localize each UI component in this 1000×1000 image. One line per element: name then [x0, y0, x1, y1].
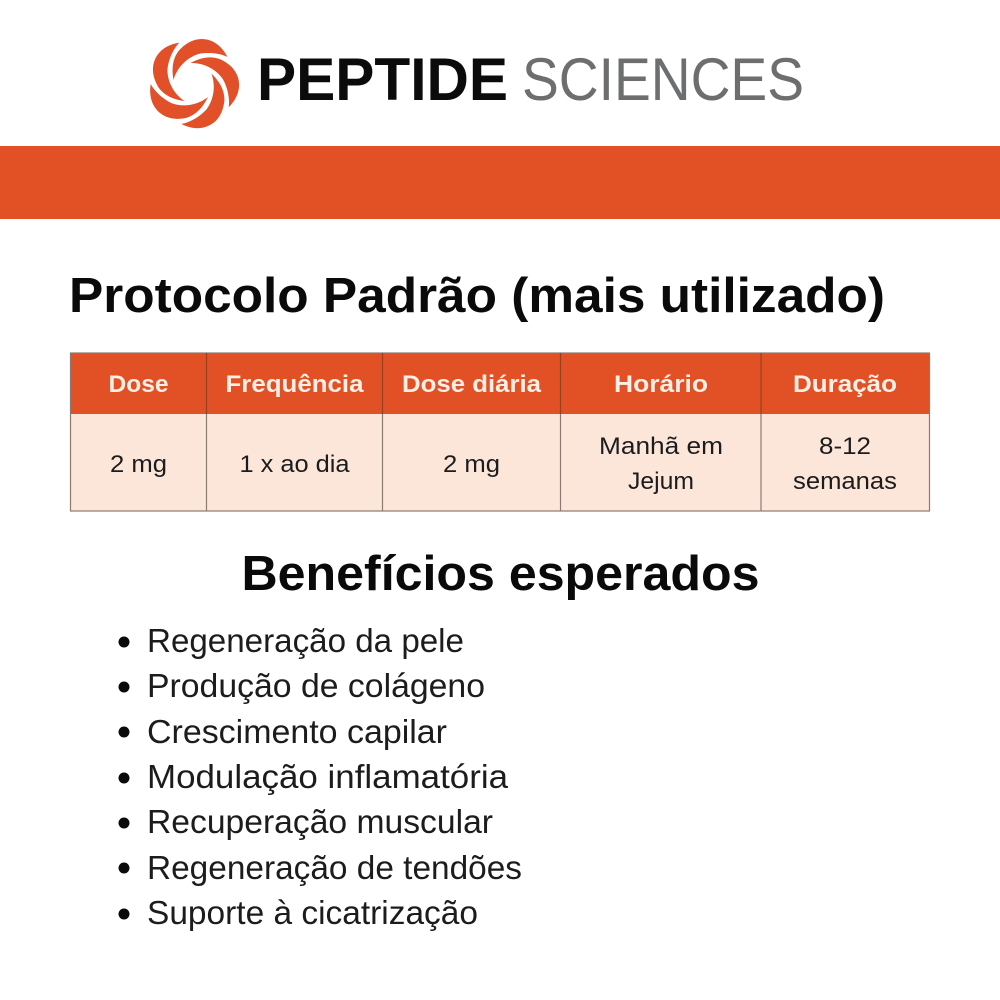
list item 4: Modulação inflamatória: [147, 758, 509, 795]
benefits list: [118, 622, 522, 931]
table body values: 2 mg: [443, 451, 500, 478]
icon: swirl logo mark: [140, 37, 246, 139]
heading: protocol: Protocolo Padrão (mais utilizado): [69, 269, 885, 323]
logo wordmark: SCIENCES: SCIENCES: [522, 46, 804, 113]
heading: benefits: Benefícios esperados: [242, 547, 760, 601]
list item 1: Regeneração da pele: [147, 622, 464, 659]
table header labels: Frequência: [226, 371, 364, 398]
list item 7: Suporte à cicatrização: [147, 894, 478, 931]
table header labels: [108, 371, 897, 398]
table body values: semanas: [793, 468, 897, 495]
table header labels: Horário: [614, 371, 708, 398]
table header labels: Dose: [108, 371, 168, 398]
table body values: 2 mg: [110, 451, 167, 478]
list item 2: Produção de colágeno: [147, 667, 485, 704]
list item 6: Regeneração de tendões: [147, 849, 522, 886]
table body values: Jejum: [628, 468, 694, 495]
logo: [140, 37, 804, 139]
table body values: 8-12: [819, 433, 871, 460]
table body values: [110, 433, 897, 495]
orange banner: [0, 146, 1000, 219]
table: protocol: [70, 353, 930, 511]
table header row: [70, 353, 930, 414]
table body values: 1 x ao dia: [240, 451, 350, 478]
table body values: Manhã em: [599, 433, 723, 460]
logo wordmark: PEPTIDE: PEPTIDE: [257, 46, 508, 113]
list item 5: Recuperação muscular: [147, 803, 493, 840]
table body row: [70, 414, 930, 511]
table header labels: Duração: [793, 371, 897, 398]
list item 3: Crescimento capilar: [147, 713, 447, 750]
table header labels: Dose diária: [402, 371, 542, 398]
